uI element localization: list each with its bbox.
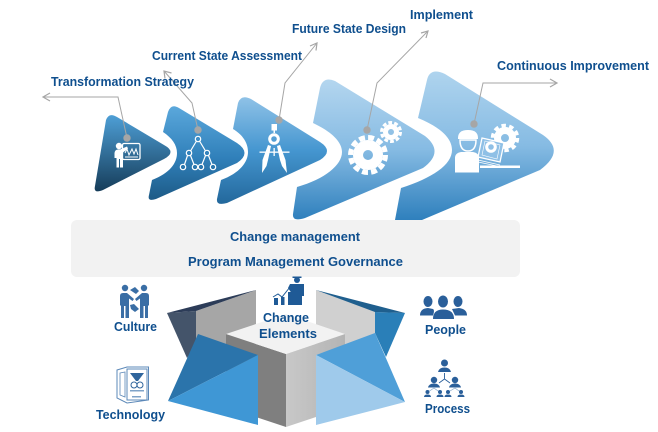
right wall bbox=[316, 290, 375, 350]
label: Elements: Elements bbox=[259, 326, 317, 341]
left lower wing bbox=[168, 355, 258, 425]
icon: gears bbox=[350, 122, 400, 172]
label: Continuous Improvement: Continuous Improvement bbox=[497, 58, 650, 73]
icon: people group bbox=[420, 296, 467, 319]
icon: 3D printer bbox=[117, 367, 148, 403]
icon: presenter with chart board bbox=[114, 143, 140, 168]
panel: change management and governance bbox=[71, 220, 520, 277]
chevron: continuous improvement bbox=[395, 72, 554, 220]
label: Process: Process bbox=[425, 401, 470, 416]
label: Culture: Culture bbox=[114, 319, 157, 334]
block top face bbox=[226, 314, 345, 354]
leader line: continuous improvement bbox=[470, 79, 557, 128]
label: Change: Change bbox=[263, 310, 309, 325]
chevron: future state design bbox=[217, 97, 327, 204]
right upper wing bbox=[316, 333, 405, 402]
chevron: transformation strategy bbox=[95, 115, 170, 191]
block right top edge face bbox=[286, 334, 345, 427]
right lower wing bbox=[316, 355, 405, 425]
label: Future State Design: Future State Design bbox=[292, 21, 406, 36]
left flap bbox=[167, 311, 196, 358]
chevron: current state assessment bbox=[149, 106, 244, 200]
icon: engineer with laptop and gear bbox=[455, 126, 520, 172]
left upper wing bbox=[168, 334, 258, 401]
label: Technology: Technology bbox=[96, 407, 166, 422]
panel text: program management governance: Program Management Governance bbox=[188, 254, 403, 269]
label: Transformation Strategy: Transformation Strategy bbox=[51, 74, 195, 89]
panel text: change management: Change management bbox=[230, 229, 361, 244]
icon: hierarchy tree bbox=[180, 136, 216, 170]
block left face bbox=[226, 334, 286, 427]
icon: businessman with rising bars bbox=[273, 276, 304, 305]
leader line: future state design bbox=[275, 43, 317, 124]
left wall bbox=[196, 290, 256, 365]
3D change elements block bbox=[167, 290, 405, 427]
right flap top strip bbox=[316, 290, 405, 313]
label: Current State Assessment: Current State Assessment bbox=[152, 48, 303, 63]
label: People: People bbox=[425, 322, 466, 337]
chevron: implement bbox=[293, 80, 435, 219]
icon: culture handshake people bbox=[120, 285, 149, 318]
left flap top strip bbox=[167, 290, 256, 313]
leader line: implement bbox=[363, 31, 428, 134]
leader line: transformation strategy bbox=[43, 93, 131, 142]
right flap bbox=[375, 312, 405, 357]
icon: drafting compass bbox=[260, 124, 290, 173]
label: Implement: Implement bbox=[410, 7, 474, 22]
leader line: current state assessment bbox=[164, 71, 202, 134]
icon: process hierarchy bbox=[424, 360, 464, 397]
